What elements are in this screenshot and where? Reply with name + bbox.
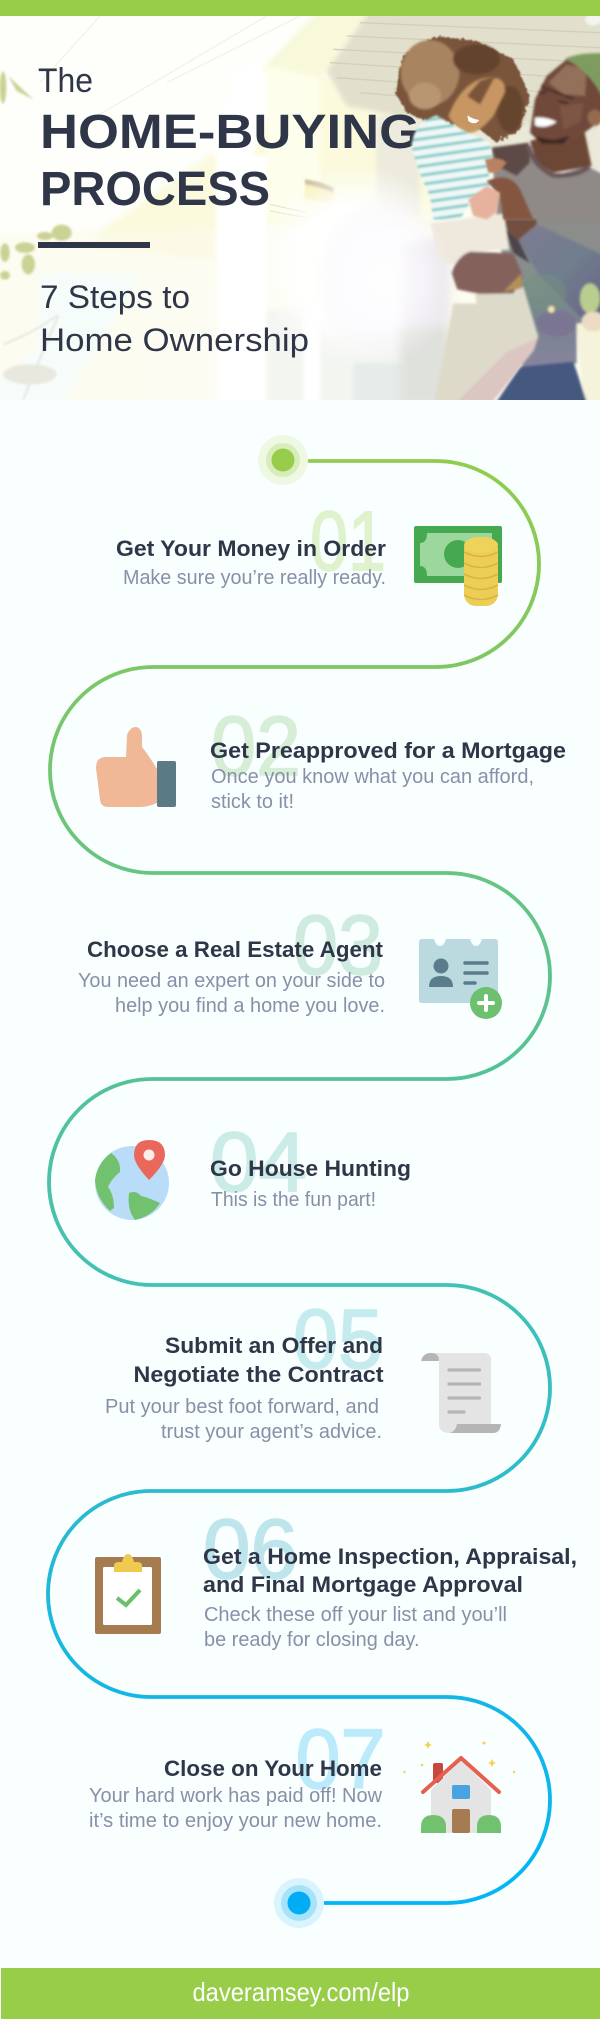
step 1 number: 01 bbox=[310, 494, 386, 588]
step 6 text: be ready for closing day. bbox=[204, 1629, 420, 1651]
step 3 bbox=[78, 898, 502, 1019]
step 5 heading bbox=[134, 1333, 384, 1387]
hero banner bbox=[0, 9, 600, 409]
step 7 heading: Close on Your Home bbox=[164, 1756, 382, 1781]
hero photo background: porch bbox=[0, 9, 600, 409]
step 6 bbox=[95, 1502, 577, 1651]
step 6 heading: and Final Mortgage Approval bbox=[203, 1572, 523, 1597]
step 7 text: Your hard work has paid off! Now bbox=[89, 1785, 383, 1807]
icon: clipboard with check bbox=[95, 1554, 161, 1634]
step 1 heading: Get Your Money in Order bbox=[116, 536, 386, 561]
step 2 text: Once you know what you can afford, bbox=[211, 766, 534, 788]
step 5 text: Put your best foot forward, and bbox=[105, 1396, 379, 1418]
step 7 text bbox=[89, 1785, 383, 1832]
step 6 heading bbox=[203, 1544, 577, 1597]
girl: legs and pants bbox=[430, 213, 538, 407]
step 1 bbox=[116, 494, 502, 606]
beadboard ceiling bbox=[327, 9, 600, 216]
step 6 text: Check these off your list and you’ll bbox=[204, 1604, 507, 1626]
lilac column behind girl's legs bbox=[400, 233, 450, 407]
step 2 bbox=[96, 699, 566, 813]
step 6 number: 06 bbox=[203, 1502, 298, 1596]
step 2 text: stick to it! bbox=[211, 791, 294, 813]
hero photo: father and daughter bbox=[393, 34, 600, 400]
icon: agent card bbox=[419, 939, 502, 1019]
end dot bbox=[274, 1878, 324, 1928]
step 5 bbox=[105, 1292, 501, 1443]
step 7 bbox=[89, 1712, 515, 1833]
step 2 heading: Get Preapproved for a Mortgage bbox=[210, 738, 566, 763]
step 3 text: You need an expert on your side to bbox=[78, 970, 385, 992]
step 2 number: 02 bbox=[211, 699, 301, 793]
top bar bbox=[0, 0, 600, 16]
subtitle line 1: 7 Steps to bbox=[40, 279, 190, 315]
title line: The: The bbox=[38, 62, 93, 100]
icon: contract scroll bbox=[421, 1353, 501, 1433]
step 4 text: This is the fun part! bbox=[211, 1189, 376, 1211]
step 5 heading: Negotiate the Contract bbox=[134, 1362, 384, 1387]
step 5 text bbox=[105, 1396, 382, 1443]
title line: HOME-BUYING: HOME-BUYING bbox=[40, 106, 420, 159]
step 6 text bbox=[204, 1604, 507, 1651]
girl: hair, face and shirt bbox=[395, 36, 533, 219]
step 4 heading: Go House Hunting bbox=[210, 1156, 411, 1181]
start dot bbox=[258, 435, 308, 485]
title rule bbox=[38, 242, 150, 248]
hero title bbox=[38, 62, 420, 358]
man: torso and jeans bbox=[496, 218, 600, 400]
hero foliage bbox=[0, 72, 72, 399]
subtitle line 2: Home Ownership bbox=[40, 322, 309, 358]
title line: PROCESS: PROCESS bbox=[40, 163, 270, 216]
hero soft light bbox=[275, 176, 433, 337]
winding route line bbox=[48, 461, 550, 1903]
step 3 text bbox=[78, 970, 385, 1017]
step 5 heading: Submit an Offer and bbox=[165, 1333, 383, 1358]
step 7 number: 07 bbox=[296, 1712, 386, 1806]
icon: money and coins bbox=[414, 526, 502, 606]
step 5 number: 05 bbox=[293, 1292, 383, 1386]
step 5 text: trust your agent’s advice. bbox=[161, 1421, 382, 1443]
step 3 heading: Choose a Real Estate Agent bbox=[87, 937, 383, 962]
step 3 text: help you find a home you love. bbox=[115, 995, 385, 1017]
step 3 number: 03 bbox=[293, 898, 383, 992]
footer url: daveramsey.com/elp bbox=[192, 1977, 410, 2007]
icon: globe with map pin bbox=[95, 1140, 169, 1220]
icon: thumbs up bbox=[96, 727, 176, 807]
footer bar bbox=[1, 1968, 600, 2019]
step 4 bbox=[95, 1115, 411, 1220]
step 6 heading: Get a Home Inspection, Appraisal, bbox=[203, 1544, 577, 1569]
icon: house with sparkles bbox=[403, 1741, 515, 1833]
step 4 number: 04 bbox=[210, 1115, 307, 1209]
step 2 text bbox=[211, 766, 534, 813]
hero lamp bbox=[305, 179, 333, 203]
man: head and shoulders bbox=[492, 53, 600, 219]
hero photo side fade bbox=[399, 248, 429, 344]
step 7 text: it’s time to enjoy your new home. bbox=[89, 1810, 382, 1832]
step 1 text: Make sure you’re really ready. bbox=[123, 567, 386, 589]
